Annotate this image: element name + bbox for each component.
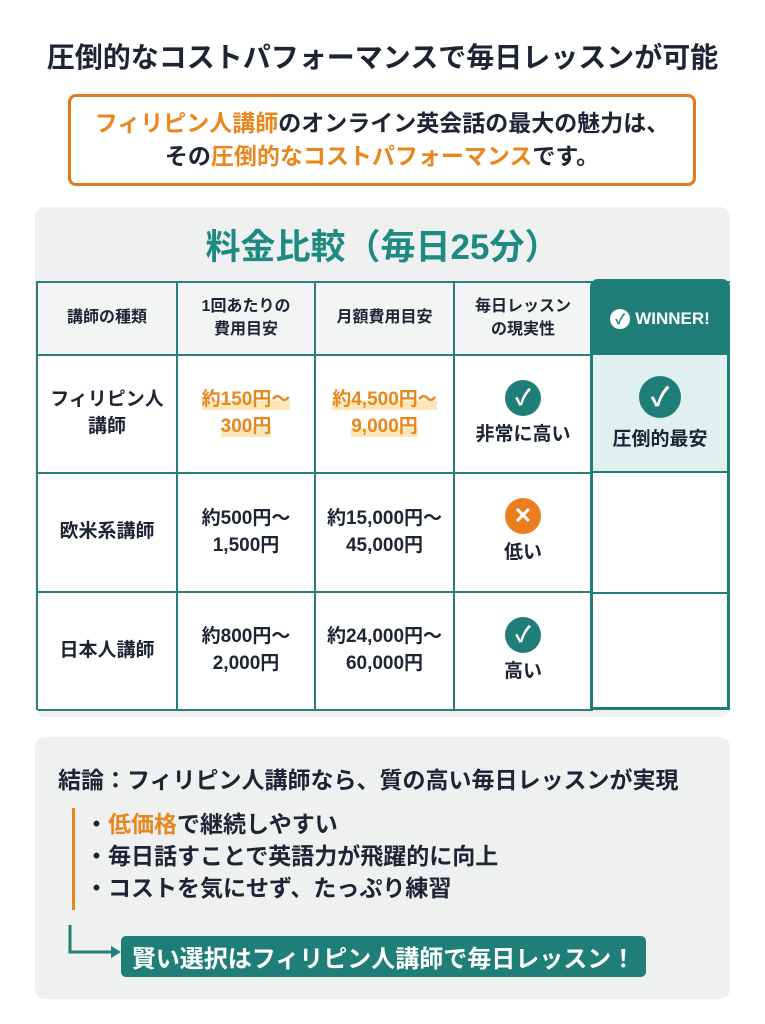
comparison table: ✓ (515, 622, 531, 647)
bullet list: ・コストを気にせず、たっぷり練習 (85, 875, 451, 901)
comparison table: 毎日レッスン (475, 298, 571, 315)
comparison table (36, 281, 730, 710)
comparison table: 1回あたりの (202, 298, 290, 315)
comparison table: 300円 (221, 416, 271, 437)
comparison table: 約4,500円〜 (332, 389, 437, 410)
header row: 講師の種類 (67, 309, 147, 326)
comparison table: 約150円〜 (202, 389, 290, 410)
winner column (590, 279, 730, 710)
row: Filipino (38, 356, 178, 474)
table heading: 料金比較（毎日25分） (206, 228, 559, 266)
comparison table: ✓ (515, 385, 531, 410)
intro callout: その圧倒的なコストパフォーマンスです。 (165, 143, 599, 169)
comparison table: 高い (504, 661, 542, 682)
conclusion heading: 結論：フィリピン人講師なら、質の高い毎日レッスンが実現 (58, 767, 679, 793)
comparison table: 約24,000円〜 (327, 626, 442, 647)
row: Filipino: フィリピン人 (50, 389, 164, 410)
winner header: WINNER! (635, 308, 710, 328)
comparison table: 1,500円 (213, 534, 279, 556)
winner header (593, 282, 727, 355)
comparison table: 45,000円 (346, 534, 423, 556)
row: Western: 欧米系講師 (59, 521, 154, 542)
intro callout (68, 94, 696, 186)
panel: conclusion (35, 737, 730, 999)
bullet list: ・毎日話すことで英語力が飛躍的に向上 (85, 843, 498, 869)
comparison table: 9,000円 (351, 416, 418, 437)
comparison table: 約15,000円〜 (327, 508, 442, 529)
comparison table: 費用目安 (214, 320, 278, 338)
row: Western (38, 474, 178, 593)
comparison table: 約800円〜 (202, 626, 290, 647)
comparison table: 2,000円 (213, 653, 279, 674)
row: Japanese: 日本人講師 (59, 640, 154, 661)
intro callout: フィリピン人講師のオンライン英会話の最大の魅力は、 (95, 110, 669, 136)
comparison table: の現実性 (491, 320, 555, 338)
winner cell: ✓ (651, 382, 669, 412)
comparison table: 60,000円 (346, 653, 423, 674)
panel: price comparison (35, 207, 730, 717)
call to action: 賢い選択はフィリピン人講師で毎日レッスン！ (132, 946, 635, 973)
comparison table: 非常に高い (475, 424, 570, 445)
arrow (68, 925, 121, 958)
row: Filipino: 講師 (88, 416, 126, 437)
row: Japanese (38, 593, 178, 711)
winner cell: 圧倒的最安 (612, 428, 708, 450)
comparison table: ✕ (514, 503, 532, 528)
call to action (121, 936, 646, 977)
title: 圧倒的なコストパフォーマンスで毎日レッスンが可能 (47, 42, 718, 73)
header row (38, 283, 178, 356)
bullet list (72, 808, 532, 910)
winner cell (593, 355, 727, 473)
comparison table: 約500円〜 (202, 508, 290, 529)
comparison table: 月額費用目安 (336, 309, 432, 326)
winner pointer (650, 354, 670, 364)
winner header: ✓ (615, 310, 625, 326)
bullet list: ・低価格で継続しやすい (85, 811, 338, 837)
comparison table: 低い (504, 542, 542, 563)
